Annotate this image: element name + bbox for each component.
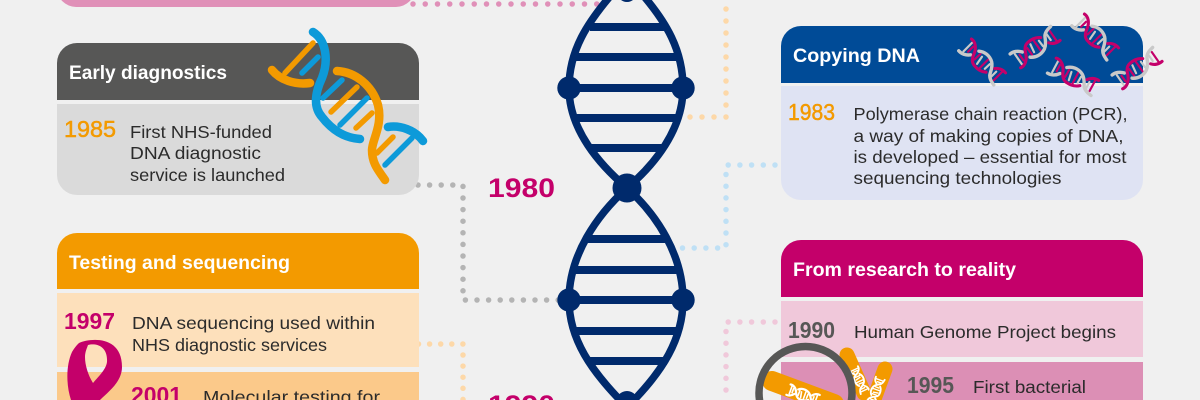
panel: testing and sequencing: NHS diagnostic services bbox=[132, 335, 327, 355]
panel: early diagnostics: First NHS-funded bbox=[130, 122, 272, 142]
year label 1980: 1980 bbox=[488, 173, 555, 203]
panel: copying DNA: Polymerase chain reaction (PCR), bbox=[854, 104, 1128, 124]
panel: early diagnostics: Early diagnostics bbox=[69, 63, 227, 84]
panel: top pink (cropped) bbox=[57, 0, 415, 7]
icon: five small DNA strands bbox=[959, 14, 1164, 106]
icon: awareness ribbon bbox=[67, 340, 122, 400]
panel: copying DNA: is developed – essential for most bbox=[854, 147, 1127, 167]
panel: from research to reality: First bacterial bbox=[973, 377, 1086, 397]
panel: from research to reality bbox=[781, 240, 1143, 400]
panel: early diagnostics: service is launched bbox=[130, 165, 285, 185]
panel: from research to reality: 1995 bbox=[907, 372, 954, 398]
panel: early diagnostics: 1985 bbox=[64, 116, 116, 142]
icon: orange and blue DNA bbox=[272, 32, 423, 180]
panel: copying DNA: Copying DNA bbox=[793, 46, 920, 67]
panel: copying DNA: sequencing technologies bbox=[854, 168, 1062, 188]
panel: copying DNA bbox=[781, 26, 1143, 200]
panel: testing and sequencing: DNA sequencing used within bbox=[132, 313, 375, 333]
panel: from research to reality: Human Genome Project begins bbox=[854, 322, 1116, 342]
panel: testing and sequencing: Testing and sequencing bbox=[69, 253, 290, 274]
panel: testing and sequencing bbox=[57, 233, 419, 400]
panel: copying DNA: 1983 bbox=[788, 99, 835, 125]
central DNA helix bbox=[557, 0, 695, 400]
panel: copying DNA: a way of making copies of DNA, bbox=[854, 126, 1124, 146]
panel: from research to reality: From research to reality bbox=[793, 260, 1016, 281]
panel: from research to reality: 1990 bbox=[788, 317, 835, 343]
dotted connectors bbox=[413, 0, 775, 400]
panel: early diagnostics: DNA diagnostic bbox=[130, 143, 261, 163]
panel: testing and sequencing: 1997 bbox=[64, 308, 115, 334]
panel: early diagnostics bbox=[57, 43, 419, 195]
icon: magnifier with DNA capsules bbox=[759, 346, 893, 400]
